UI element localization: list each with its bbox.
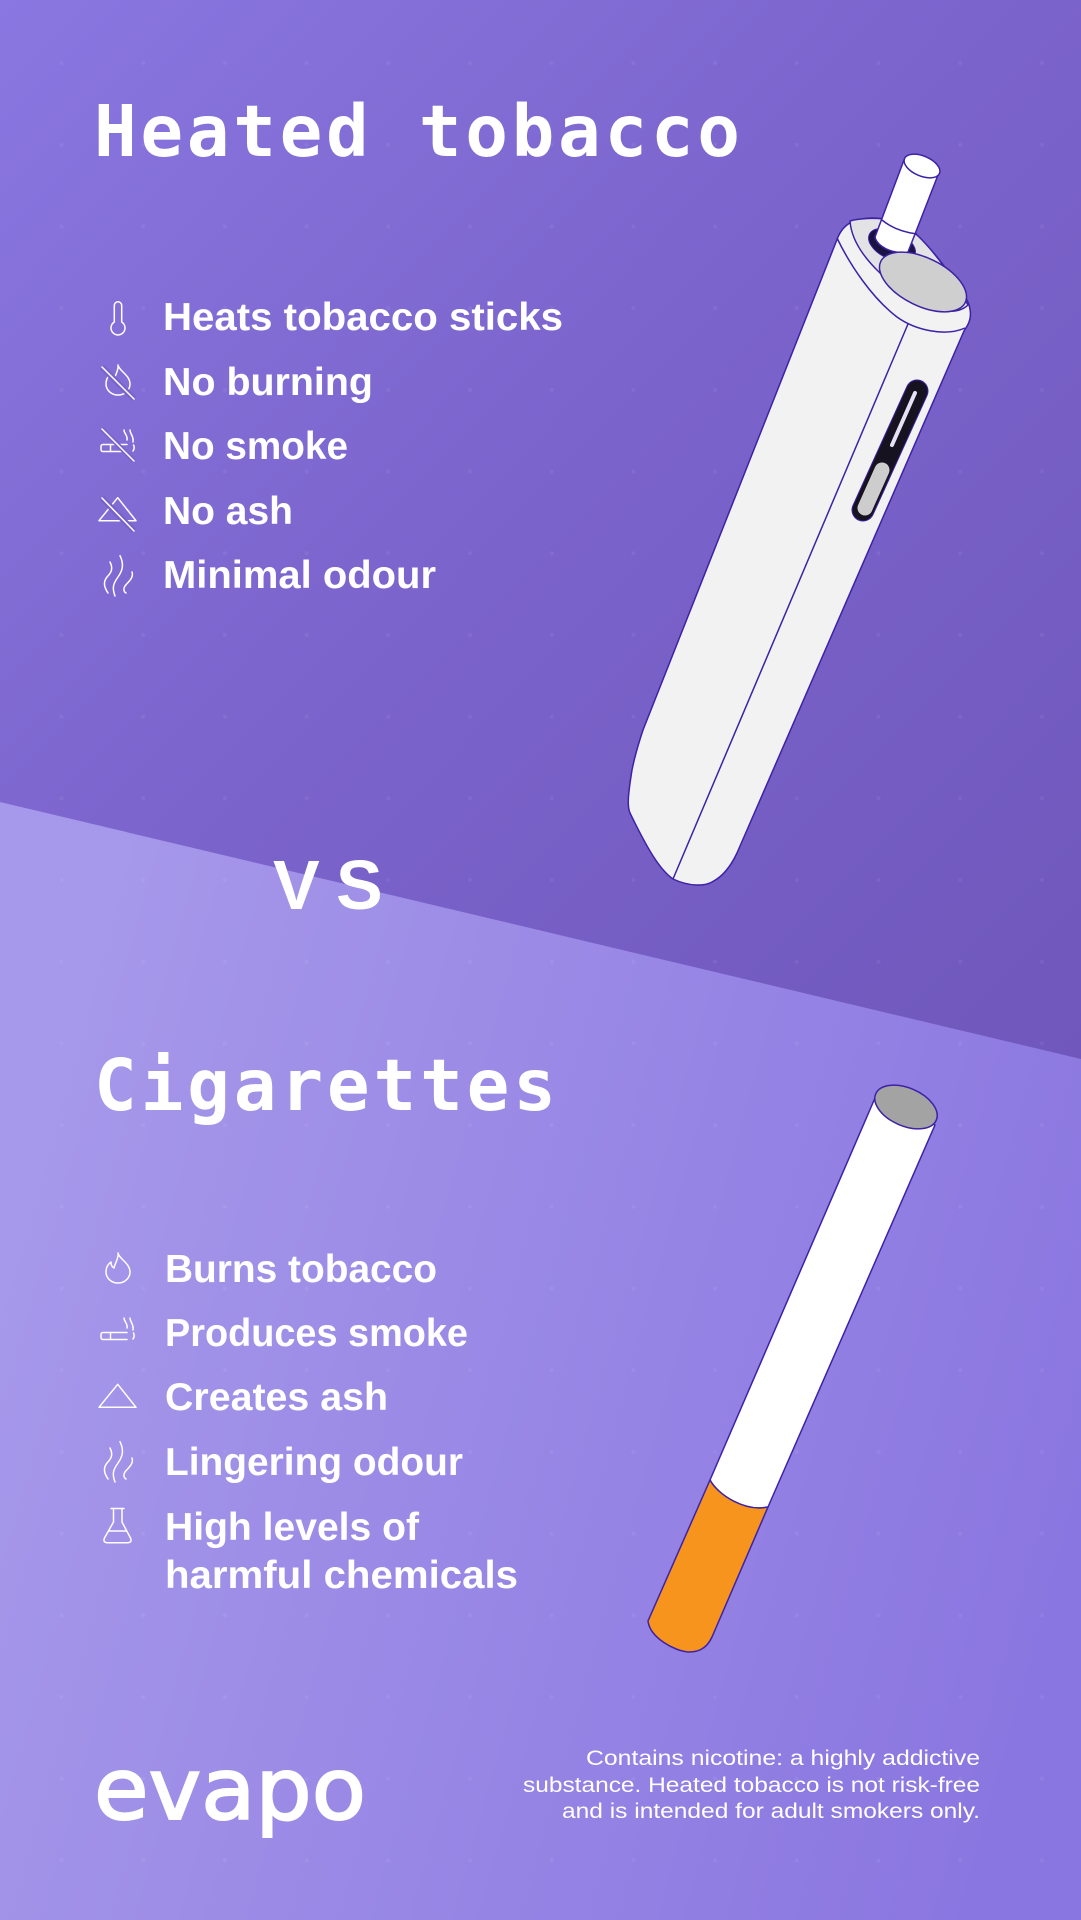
indicator slot <box>863 391 917 510</box>
background: cigarettes panel <box>0 802 1081 1920</box>
heading: Cigarettes: Cigarettes <box>94 1044 556 1127</box>
cigarette filter <box>648 1480 768 1652</box>
device lid <box>870 240 976 324</box>
disclaimer note <box>523 1746 980 1823</box>
icon: no ash <box>99 498 136 531</box>
logo: evapo: evapo <box>94 1740 366 1840</box>
icon: cigarette with smoke <box>101 1318 134 1340</box>
cigarette paper <box>710 1098 935 1508</box>
list: cigarette features <box>99 1248 518 1597</box>
text: burns tobacco: Burns tobacco <box>165 1248 437 1291</box>
text: no burning: No burning <box>163 361 373 404</box>
text: lingering odour: Lingering odour <box>165 1441 463 1484</box>
text: no ash: No ash <box>163 490 293 533</box>
icon: thermometer <box>111 302 125 335</box>
tobacco stick <box>875 149 943 253</box>
text: produces smoke: Produces smoke <box>165 1312 468 1355</box>
illustration: heated tobacco device <box>628 149 976 885</box>
text: minimal odour: Minimal odour <box>163 554 436 597</box>
disclaimer note: Contains nicotine: a highly addictive <box>586 1746 980 1770</box>
icon: ash triangle <box>99 1384 136 1407</box>
list: heated tobacco features <box>99 296 563 597</box>
label: VS: VS <box>273 846 383 924</box>
icon: no smoke <box>101 429 134 461</box>
icon: odour waves <box>104 556 132 596</box>
icon: flame <box>106 1253 130 1283</box>
text: heats tobacco sticks: Heats tobacco sticks <box>163 296 563 339</box>
text: high levels of harmful chemicals <box>165 1506 518 1597</box>
side seam line <box>673 324 908 879</box>
icon: flask <box>104 1508 131 1543</box>
illustration: cigarette <box>648 1076 944 1652</box>
text: high levels of harmful chemicals: High levels of <box>165 1506 419 1549</box>
text: creates ash: Creates ash <box>165 1376 388 1419</box>
heading: Heated tobacco: Heated tobacco <box>94 90 740 173</box>
text: high levels of harmful chemicals: harmful chemicals <box>165 1554 518 1597</box>
icon: no flame <box>102 365 134 399</box>
icon: odour waves <box>104 1442 132 1482</box>
disclaimer note: and is intended for adult smokers only. <box>562 1799 980 1823</box>
heating chamber opening <box>863 222 921 268</box>
text: no smoke: No smoke <box>163 425 348 468</box>
device top face <box>850 218 968 311</box>
disclaimer note: substance. Heated tobacco is not risk-free <box>523 1773 980 1797</box>
device body <box>628 218 970 885</box>
cap seam line <box>837 238 965 332</box>
cigarette tip <box>868 1076 944 1138</box>
